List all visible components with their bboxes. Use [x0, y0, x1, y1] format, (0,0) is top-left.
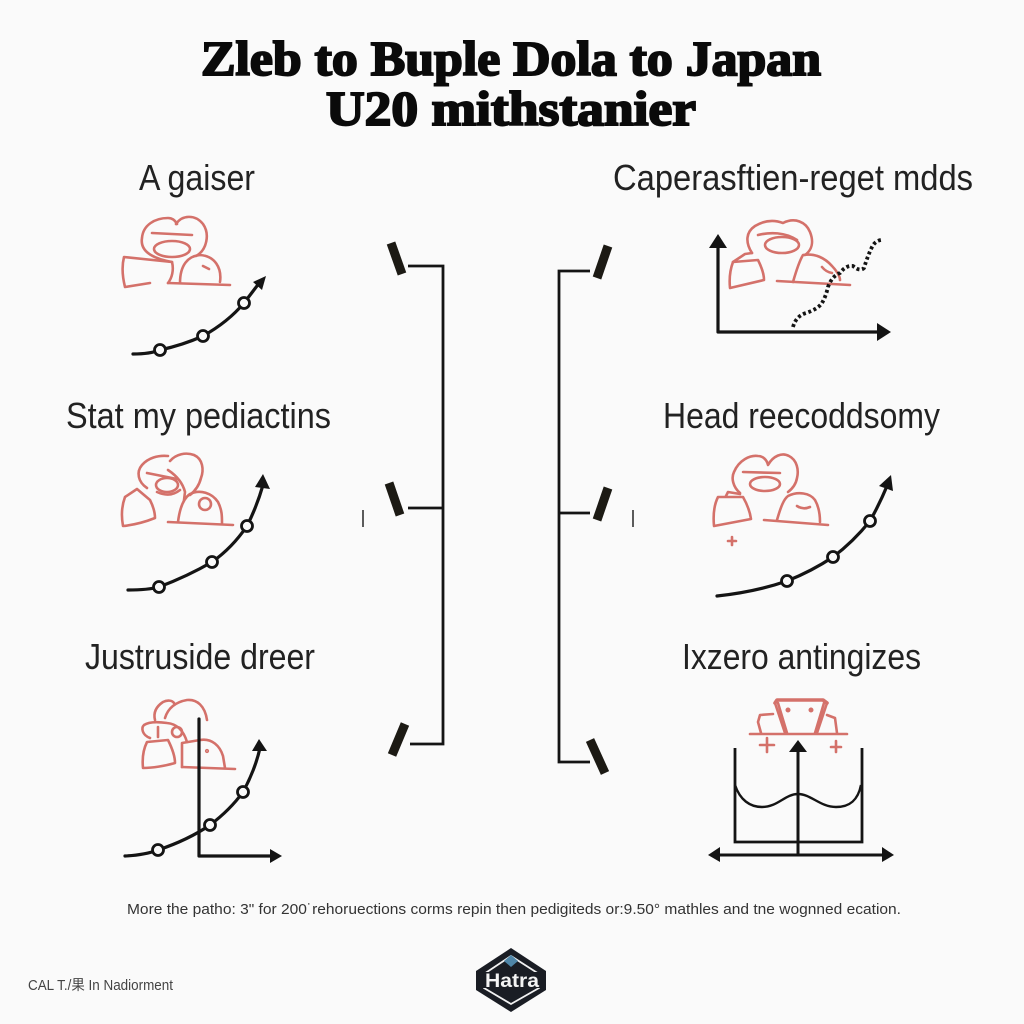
panel: Caperasftien-reget mdds — [613, 157, 973, 341]
footnote text: More the patho: 3" for 200˙rehoruections corms repin then pedigiteds or:9.50° mathles and tne wognned ecation. — [127, 901, 901, 918]
heading: A gaiser: A gaiser — [139, 157, 255, 198]
title: Zleb to Buple Dola to Japan — [201, 31, 821, 86]
left bracket connector — [363, 243, 443, 755]
icon: red pictogram 5 — [142, 700, 235, 769]
icon: red pictogram 6 — [750, 700, 847, 752]
right bracket connector — [559, 246, 633, 773]
title: U20 mithstanier — [326, 81, 696, 136]
logo: Hatra hexagon — [476, 948, 546, 1012]
chart: rising curve 1 — [133, 276, 266, 356]
source credit: CAL T./果 In Nadiorment — [28, 978, 173, 994]
icon: red pictogram 2 — [730, 220, 850, 288]
panel: Ixzero antingizes — [682, 636, 921, 862]
title — [201, 31, 821, 136]
heading: Head reecoddsomy: Head reecoddsomy — [663, 395, 940, 436]
panel: Stat my pediactins — [66, 395, 331, 592]
panel: Justruside dreer — [85, 636, 315, 863]
logo: Hatra hexagon: Hatra — [485, 971, 539, 992]
chart: axes with rising curve 5 — [125, 719, 282, 863]
heading: Ixzero antingizes: Ixzero antingizes — [682, 636, 921, 677]
icon: red pictogram 1 — [123, 217, 230, 287]
chart: rising curve 4 — [717, 475, 893, 596]
chart: rising curve 2 — [128, 474, 270, 592]
panel: A gaiser — [123, 157, 266, 356]
heading: Justruside dreer: Justruside dreer — [85, 636, 315, 677]
chart: U-frame with wave and axes — [708, 740, 894, 862]
heading: Stat my pediactins: Stat my pediactins — [66, 395, 331, 436]
icon: red pictogram 4 — [714, 454, 828, 545]
icon: red pictogram 3 — [122, 454, 233, 526]
panel: Head reecoddsomy — [663, 395, 940, 596]
heading: Caperasftien-reget mdds: Caperasftien-reget mdds — [613, 157, 973, 198]
chart: axes with dotted line — [709, 234, 891, 341]
